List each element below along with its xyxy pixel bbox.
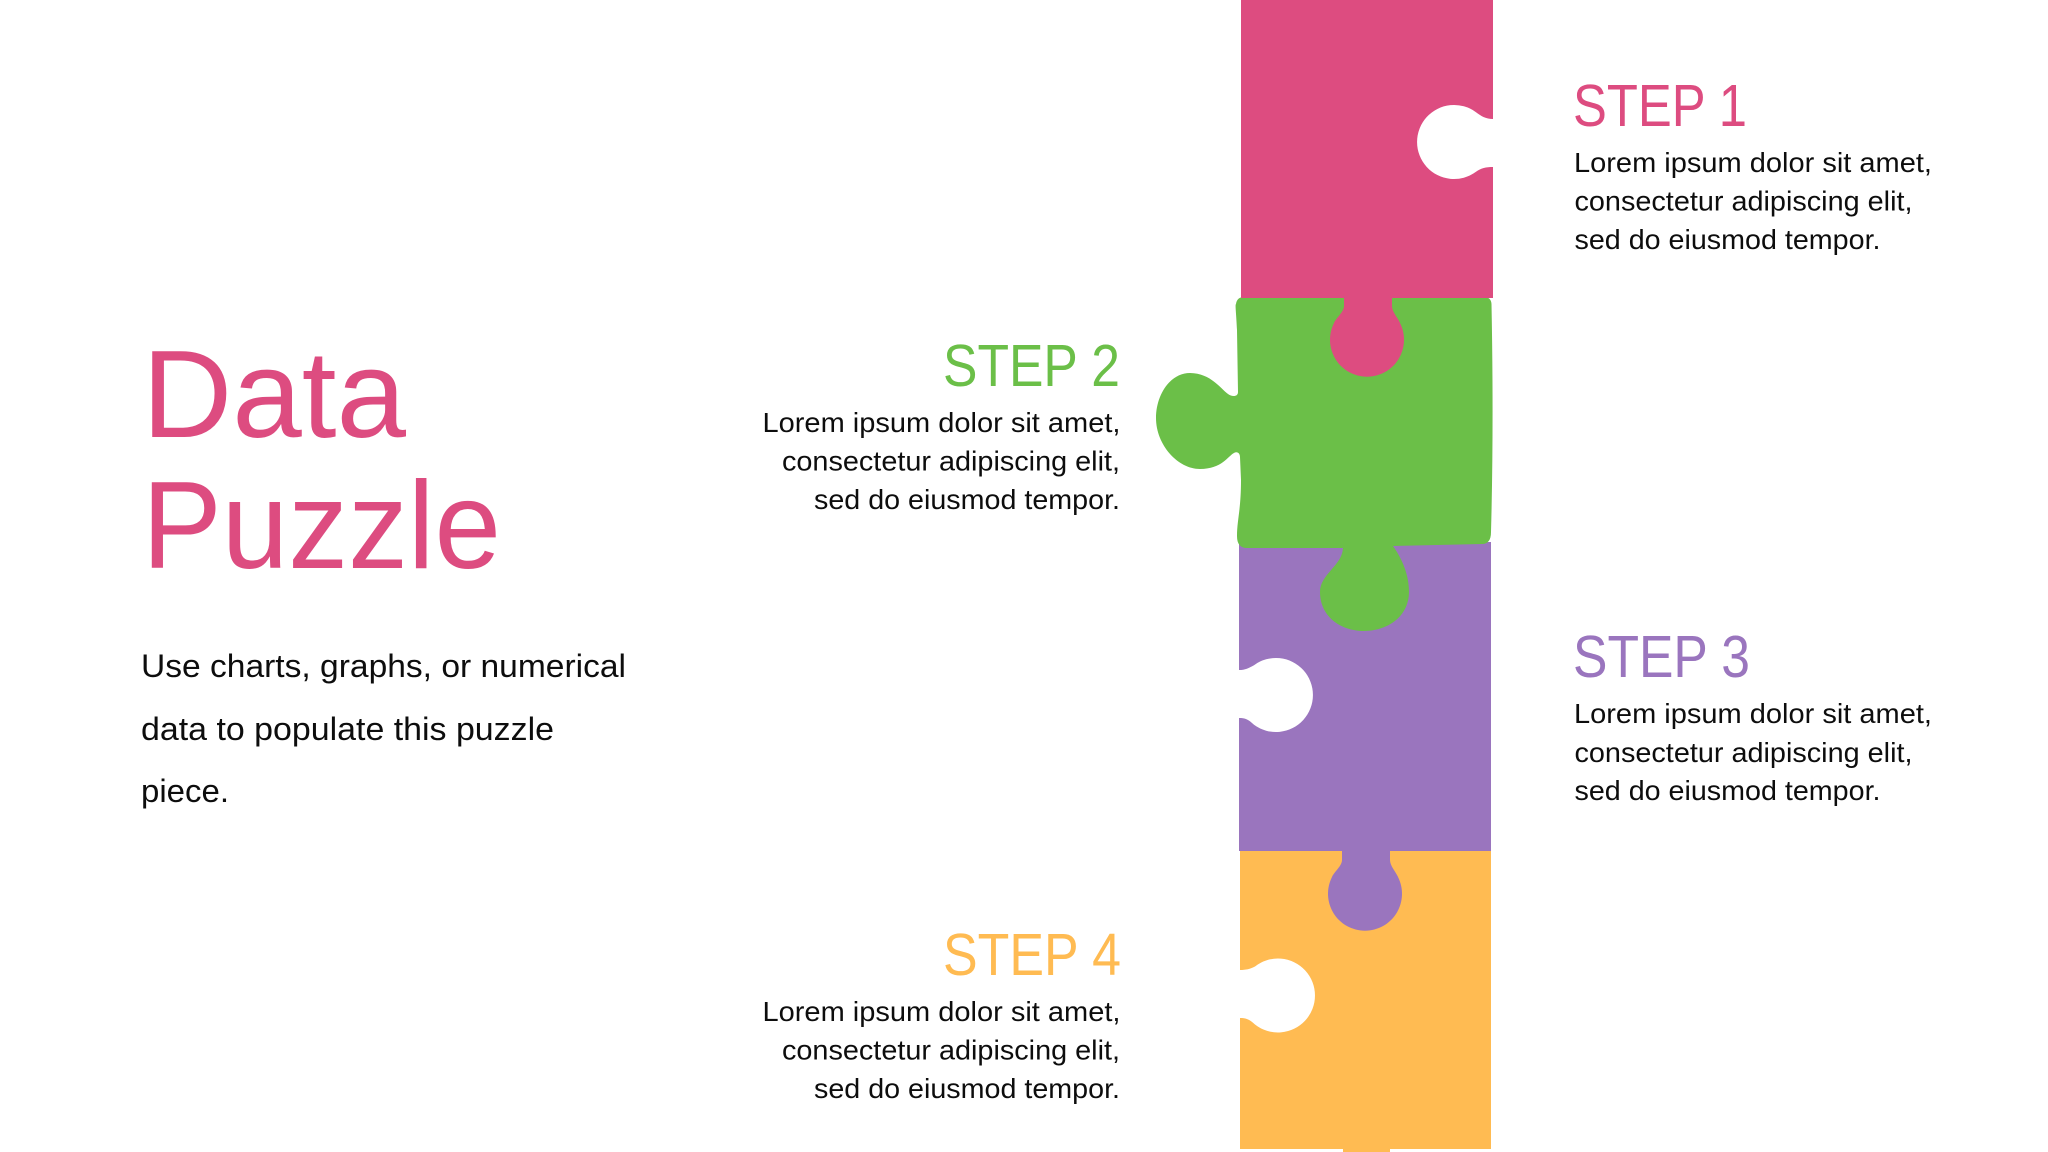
- step 4 heading: STEP 4: [943, 922, 1121, 988]
- step 1 body: Lorem ipsum dolor sit amet,: [1574, 147, 1932, 178]
- step 3 callout: [1573, 624, 1932, 806]
- step 1 body: consectetur adipiscing elit,: [1574, 186, 1912, 216]
- step 4 body: consectetur adipiscing elit,: [782, 1034, 1120, 1066]
- step 4 body: Lorem ipsum dolor sit amet,: [762, 996, 1120, 1027]
- step 3 body: consectetur adipiscing elit,: [1574, 737, 1912, 768]
- description text: Use charts, graphs, or numerical: [141, 648, 626, 684]
- step 1 body: [1574, 147, 1932, 255]
- step 4 body: [762, 996, 1120, 1104]
- puzzle column: [1156, 0, 1493, 1152]
- puzzle piece: step 4 orange: [1240, 851, 1491, 1152]
- description text: [141, 648, 626, 809]
- description text: data to populate this puzzle: [141, 711, 554, 747]
- step 2 body: sed do eiusmod tempor.: [814, 484, 1120, 515]
- puzzle piece: step 3 purple: [1239, 542, 1491, 931]
- puzzle piece: step 1 pink: [1241, 0, 1493, 377]
- step 2 body: [762, 407, 1120, 515]
- step 1 callout: [1573, 73, 1932, 255]
- step 1 heading: STEP 1: [1573, 73, 1747, 139]
- step 3 body: sed do eiusmod tempor.: [1574, 775, 1880, 806]
- puzzle piece: step 2 green: [1156, 297, 1493, 631]
- step 3 body: [1574, 698, 1932, 806]
- step 3 heading: STEP 3: [1573, 624, 1750, 690]
- title: Data: [142, 326, 406, 464]
- step 2 heading: STEP 2: [943, 333, 1120, 399]
- title: Puzzle: [142, 457, 501, 595]
- step 1 body: sed do eiusmod tempor.: [1574, 224, 1880, 255]
- step 2 body: Lorem ipsum dolor sit amet,: [762, 407, 1120, 438]
- step 2 body: consectetur adipiscing elit,: [782, 446, 1120, 476]
- step 4 callout: [762, 922, 1121, 1104]
- title: [142, 326, 501, 595]
- step 4 body: sed do eiusmod tempor.: [814, 1073, 1120, 1104]
- step 3 body: Lorem ipsum dolor sit amet,: [1574, 698, 1932, 729]
- step 2 callout: [762, 333, 1120, 515]
- description text: piece.: [141, 773, 229, 809]
